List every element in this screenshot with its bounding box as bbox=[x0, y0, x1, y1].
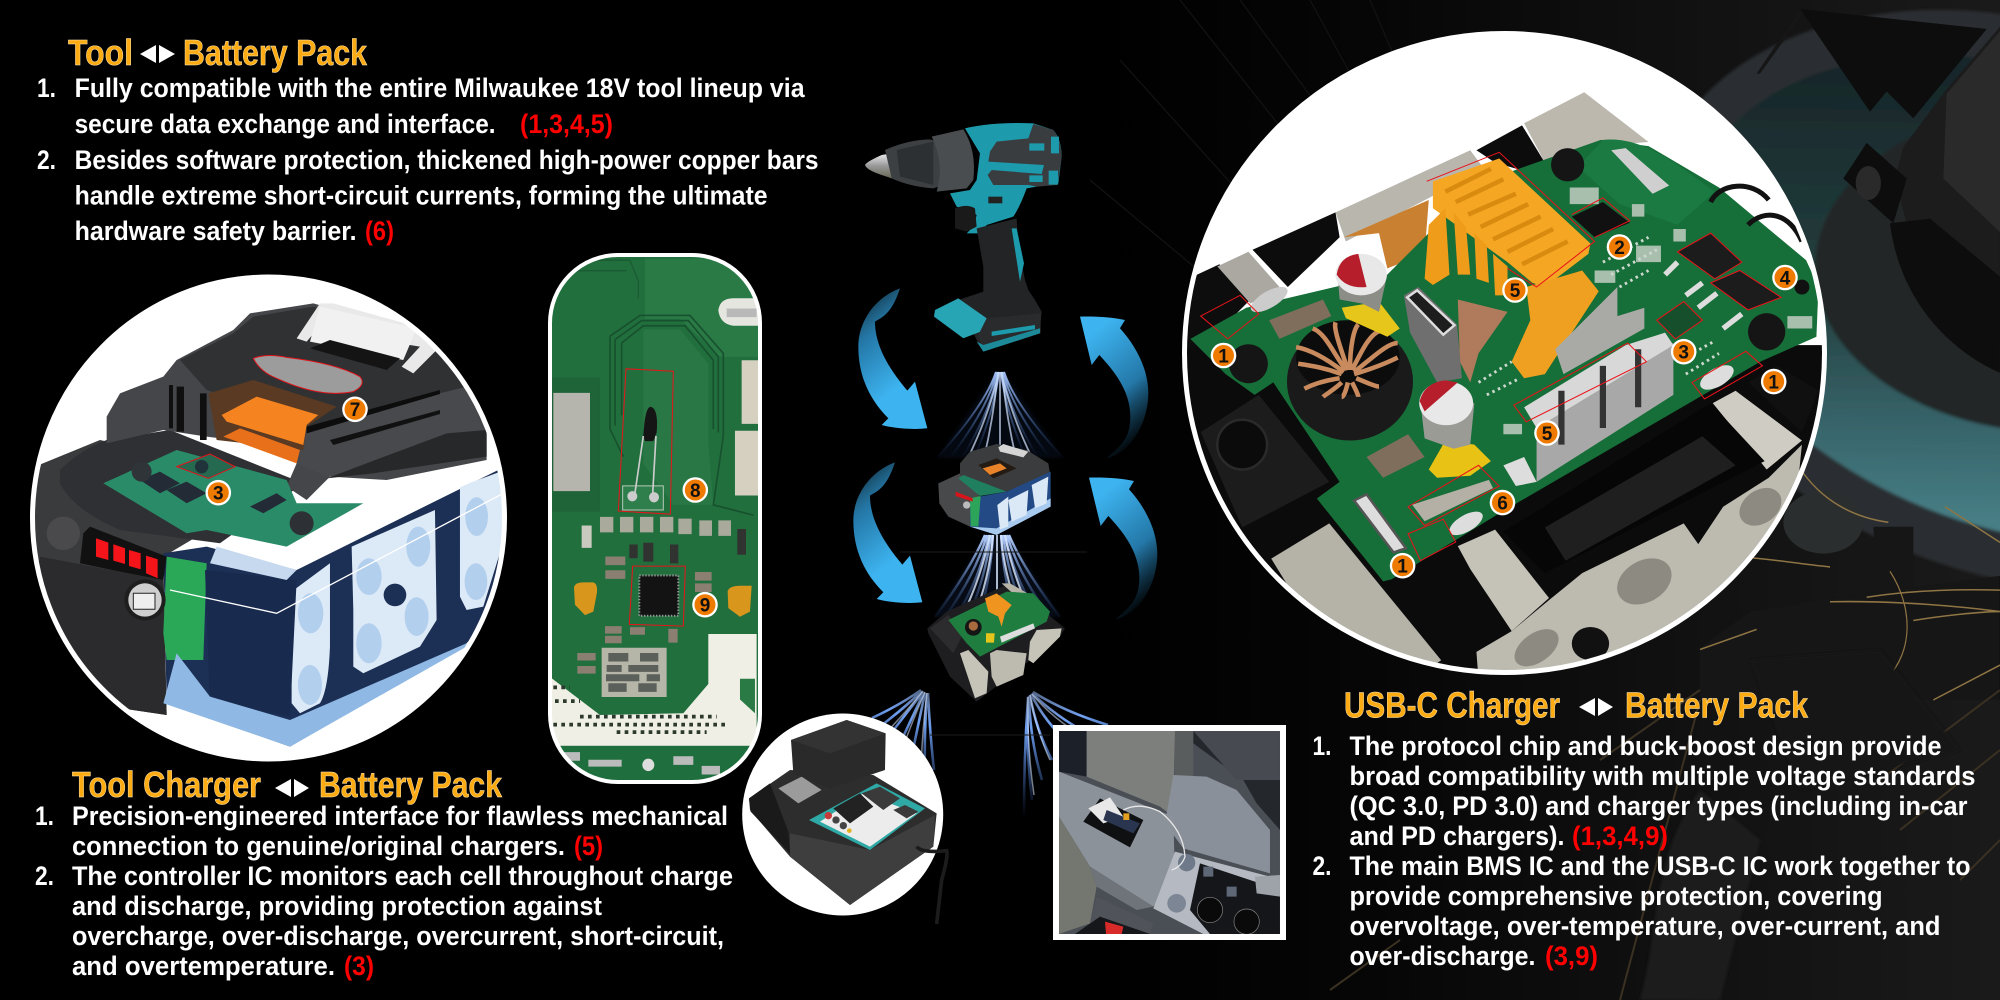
text block: USB-C Charger and Battery Pack: The main BMS IC and the USB-C IC work together to bbox=[1350, 851, 1970, 881]
panel: battery PCB close-up bbox=[1180, 34, 1830, 680]
badge 9 bbox=[692, 592, 718, 618]
badge 8 bbox=[682, 477, 708, 503]
badge 6 bbox=[1490, 490, 1515, 515]
text block: Tool Charger and Battery Pack: 2. bbox=[35, 861, 54, 891]
text block: Tool and Battery Pack bbox=[37, 73, 819, 246]
arrow: PCB to battery bbox=[1089, 477, 1157, 619]
badge 4 bbox=[1772, 265, 1798, 290]
text block: USB-C Charger and Battery Pack: The protocol chip and buck-boost design provide bbox=[1350, 731, 1942, 761]
heading: Tool and Battery Pack bbox=[68, 32, 368, 73]
light beams: PCB to tool charger bbox=[872, 690, 934, 775]
text block: USB-C Charger and Battery Pack: provide comprehensive protection, covering bbox=[1350, 881, 1882, 911]
text block: USB-C Charger and Battery Pack: 2. bbox=[1312, 851, 1332, 881]
text block: Tool and Battery Pack: handle extreme short-circuit currents, forming the ultimate bbox=[75, 180, 768, 210]
light beams: PCB to USB-C charger bbox=[1024, 692, 1108, 815]
text block: USB-C Charger and Battery Pack: over-discharge. bbox=[1350, 941, 1536, 971]
badge 1 bottom: 1 bbox=[1397, 556, 1408, 578]
badge 3 bbox=[1671, 339, 1696, 365]
badge 5 top bbox=[1502, 277, 1528, 303]
text block: Tool Charger and Battery Pack: connection to genuine/original chargers. bbox=[72, 831, 565, 861]
text block: USB-C Charger and Battery Pack: (3,9) bbox=[1545, 941, 1598, 971]
badge 3: 3 bbox=[213, 484, 224, 504]
arrow: drill to battery bbox=[858, 288, 927, 429]
arrow: battery to drill bbox=[1080, 316, 1148, 458]
text block: Tool Charger and Battery Pack bbox=[35, 801, 733, 981]
badge 8: 8 bbox=[690, 481, 701, 502]
panel: tool charger bbox=[742, 714, 947, 924]
badge 1 left: 1 bbox=[1218, 346, 1229, 367]
text block: USB-C Charger and Battery Pack: overvoltage, over-temperature, over-current, and bbox=[1350, 911, 1940, 941]
light beams: drill to battery bbox=[937, 372, 1063, 458]
badge 6: 6 bbox=[1497, 493, 1508, 514]
text block: USB-C Charger and Battery Pack: (1,3,4,9) bbox=[1572, 821, 1668, 851]
badge 3 bbox=[206, 480, 231, 506]
badge 2 bbox=[1607, 234, 1632, 260]
badge 7 bbox=[342, 396, 368, 422]
text block: Tool Charger and Battery Pack: and discharge, providing protection against bbox=[72, 891, 602, 921]
badge 5 top: 5 bbox=[1510, 281, 1521, 302]
panel: PCB close-up with thermistor and IC bbox=[547, 253, 763, 784]
panel: USB-C charger in car photo bbox=[1053, 725, 1286, 940]
image: battery pack small bbox=[938, 444, 1051, 535]
heading: USB-C Charger and Battery Pack: USB-C Charger bbox=[1344, 684, 1560, 726]
text block: Tool Charger and Battery Pack: overcharge, over-discharge, overcurrent, short-circuit, bbox=[72, 921, 724, 951]
arrow: battery to PCB bbox=[853, 462, 922, 603]
badge 4: 4 bbox=[1780, 268, 1791, 289]
text block: Tool Charger and Battery Pack: and overtemperature. bbox=[72, 951, 335, 981]
heading: Tool Charger and Battery Pack: Battery Pack bbox=[319, 764, 503, 805]
image: PCB assembly small bbox=[927, 583, 1065, 702]
text block: USB-C Charger and Battery Pack: and PD chargers). bbox=[1350, 821, 1564, 851]
badge 1 left bbox=[1211, 343, 1236, 368]
badge 1 bottom bbox=[1390, 553, 1415, 578]
text block: Tool and Battery Pack: secure data exchange and interface. bbox=[75, 109, 496, 139]
text block: Tool and Battery Pack: Fully compatible with the entire Milwaukee 18V tool lineup via bbox=[75, 73, 805, 103]
light beams: battery to PCB bbox=[935, 535, 1060, 617]
badge 9: 9 bbox=[700, 596, 710, 616]
text block: USB-C Charger and Battery Pack: broad compatibility with multiple voltage standards bbox=[1350, 761, 1976, 791]
heading: Tool Charger and Battery Pack: Tool Charger bbox=[72, 764, 261, 805]
badge 1 right bbox=[1761, 369, 1786, 394]
text block: Tool and Battery Pack: 2. bbox=[37, 145, 56, 175]
text block: Tool Charger and Battery Pack: (5) bbox=[574, 831, 603, 861]
heading: Tool and Battery Pack: Battery Pack bbox=[183, 32, 368, 73]
text block: Tool Charger and Battery Pack: Precision-engineered interface for flawless mechanical bbox=[72, 801, 728, 831]
text block: Tool Charger and Battery Pack: The controller IC monitors each cell throughout charge bbox=[72, 861, 733, 891]
image: cordless drill bbox=[865, 123, 1062, 352]
text block: Tool Charger and Battery Pack: (3) bbox=[344, 951, 374, 981]
badge 1 right: 1 bbox=[1768, 372, 1779, 393]
badge 5 bottom: 5 bbox=[1542, 424, 1553, 445]
heading: Tool Charger and Battery Pack bbox=[72, 764, 503, 805]
panel: battery pack cutaway bbox=[27, 277, 505, 759]
background photo: angle grinder bbox=[1330, 0, 2000, 1000]
text block: Tool and Battery Pack: (1,3,4,5) bbox=[520, 109, 613, 139]
badge 3: 3 bbox=[1678, 342, 1689, 364]
text block: Tool Charger and Battery Pack: 1. bbox=[35, 801, 54, 831]
divider hairlines bbox=[900, 552, 1087, 735]
badge 2: 2 bbox=[1614, 238, 1625, 259]
heading: USB-C Charger and Battery Pack bbox=[1344, 684, 1809, 726]
text block: USB-C Charger and Battery Pack: (QC 3.0, PD 3.0) and charger types (including in-car bbox=[1350, 791, 1968, 821]
badge 5 bottom bbox=[1534, 420, 1560, 446]
text block: Tool and Battery Pack: 1. bbox=[37, 73, 56, 103]
heading: USB-C Charger and Battery Pack: Battery Pack bbox=[1625, 684, 1809, 726]
text block: Tool and Battery Pack: Besides software protection, thickened high-power copper bars bbox=[75, 145, 819, 175]
text block: Tool and Battery Pack: (6) bbox=[365, 216, 394, 246]
text block: Tool and Battery Pack: hardware safety barrier. bbox=[75, 216, 357, 246]
badge 7: 7 bbox=[350, 400, 360, 421]
text block: USB-C Charger and Battery Pack: 1. bbox=[1312, 731, 1332, 761]
heading: Tool and Battery Pack: Tool bbox=[68, 32, 133, 73]
text block: USB-C Charger and Battery Pack bbox=[1312, 731, 1976, 971]
